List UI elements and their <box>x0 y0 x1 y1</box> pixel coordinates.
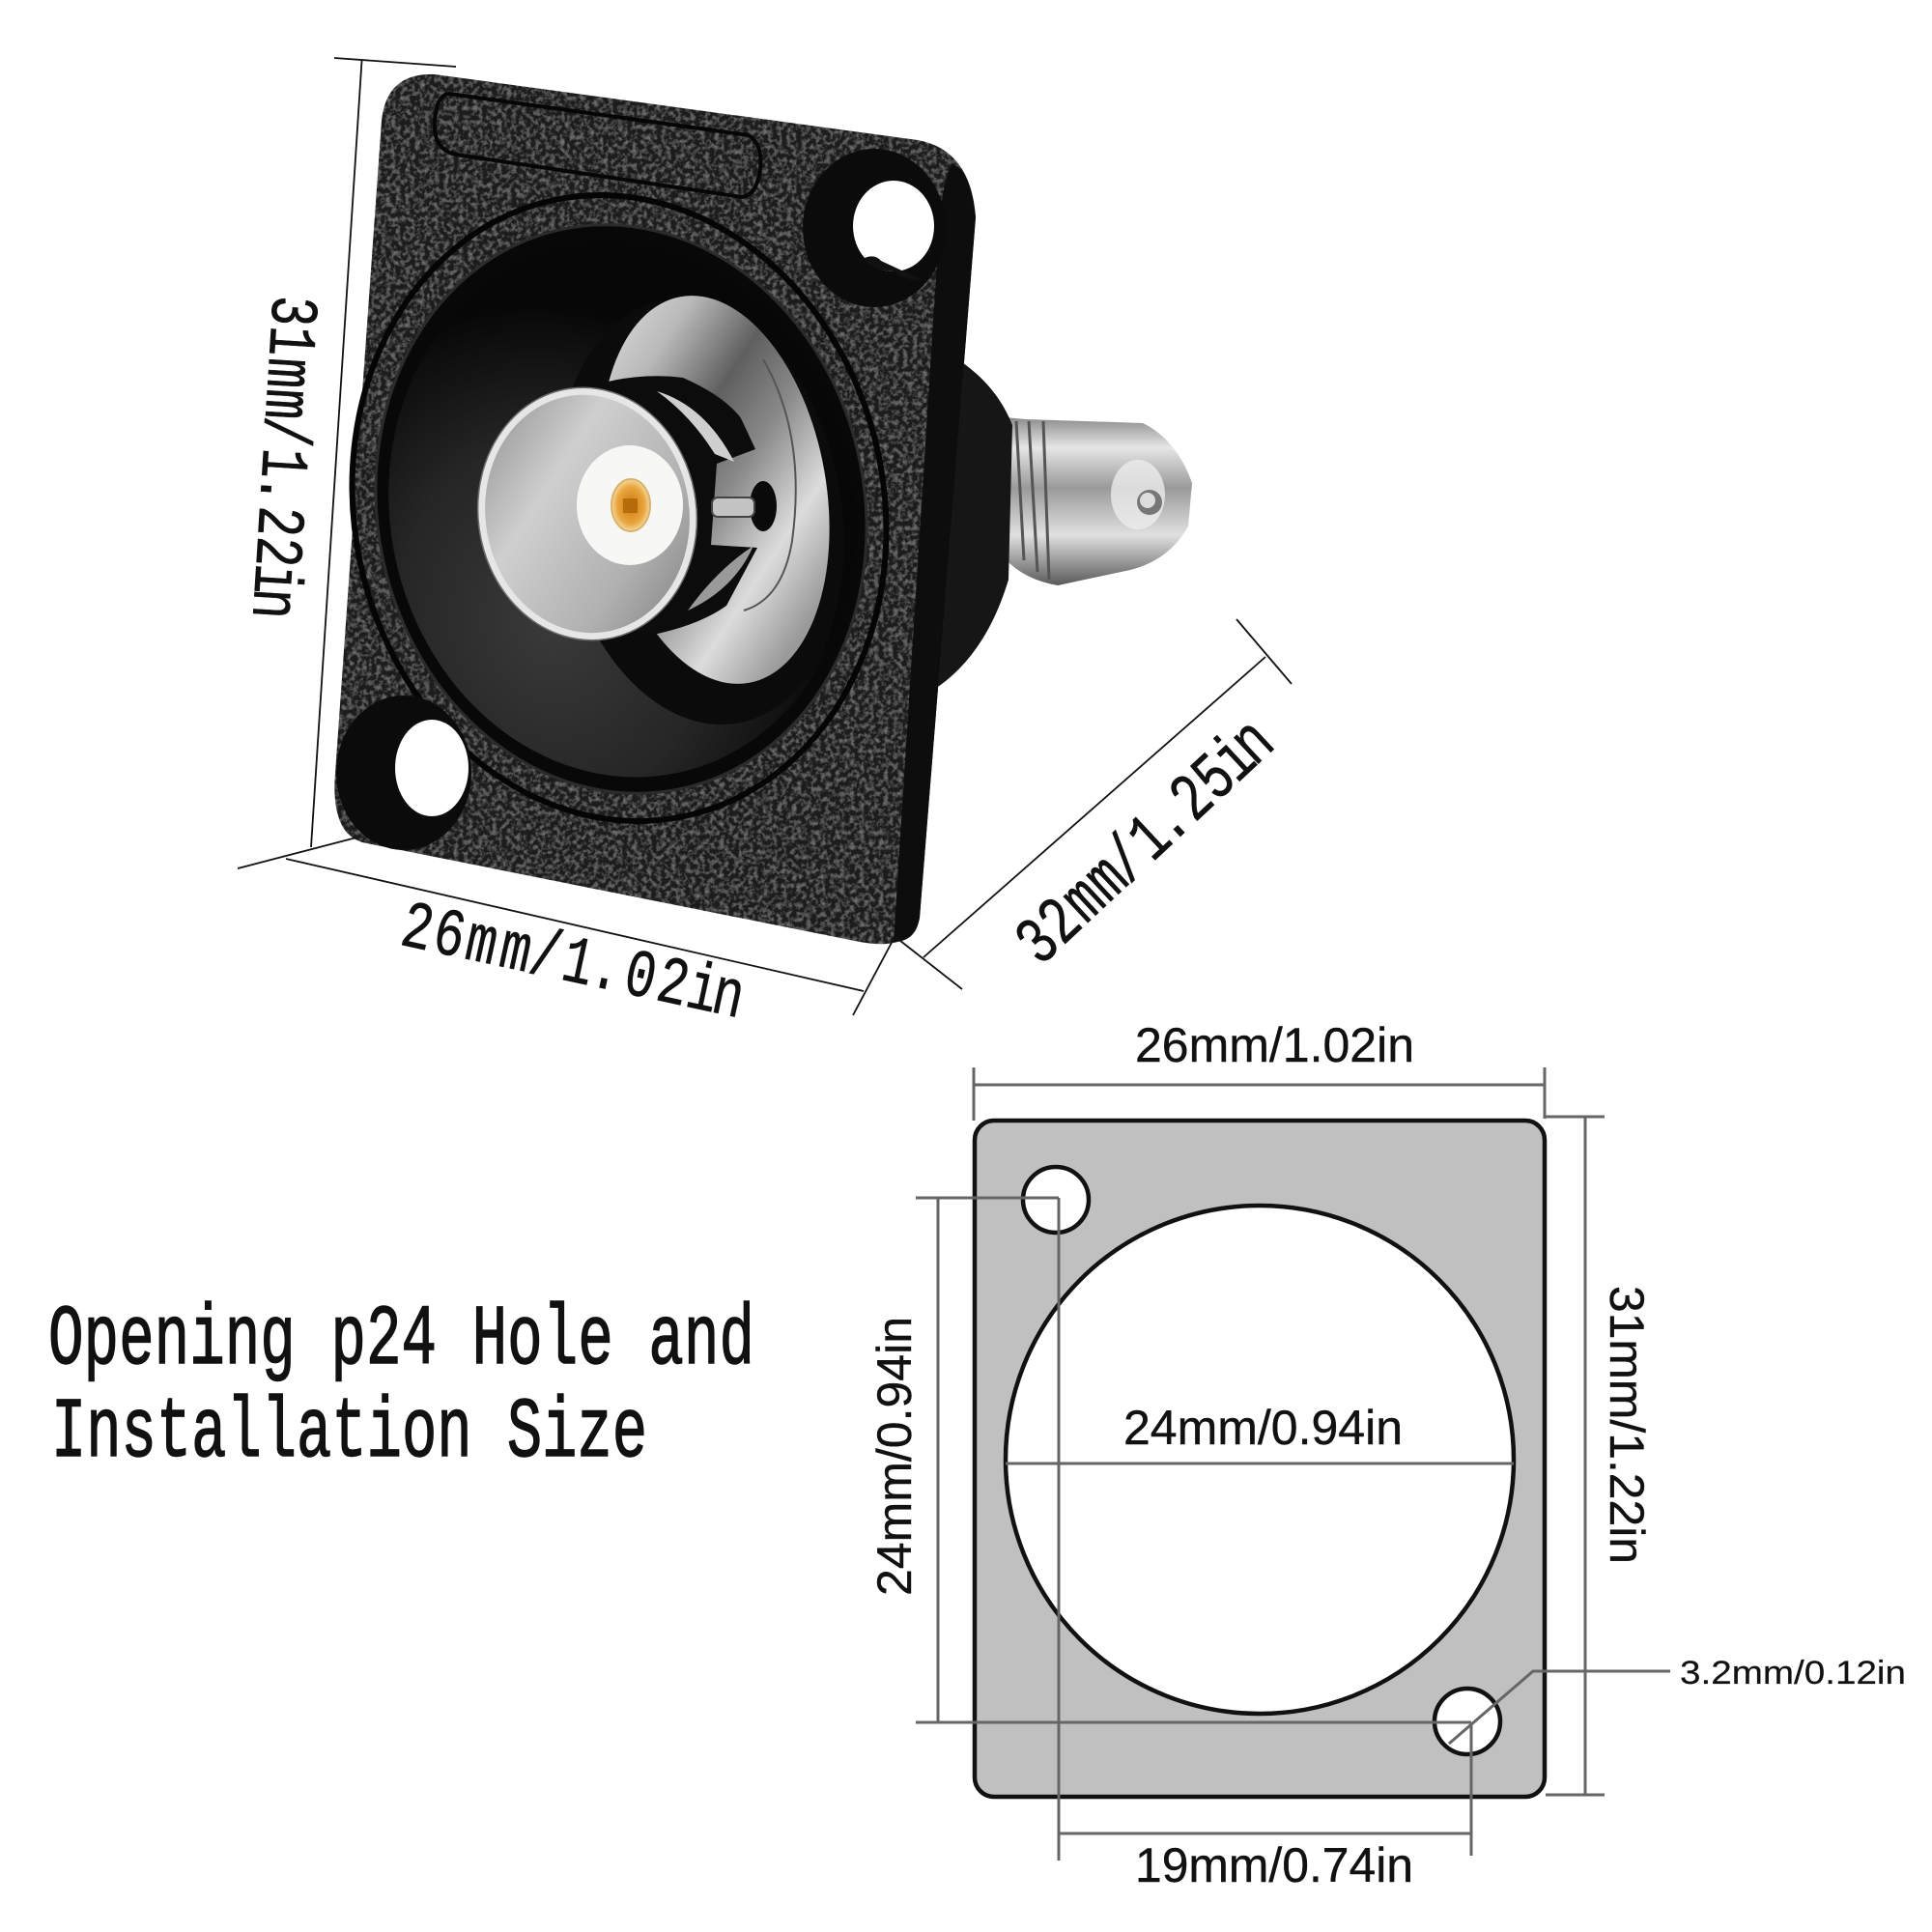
plate right edge shadow <box>894 164 976 942</box>
text: 24mm/0.94in hole: 24mm/0.94in <box>1123 1401 1403 1455</box>
recess parts <box>573 296 830 724</box>
photo dimension lines <box>238 58 1292 1015</box>
barrel front rim <box>466 378 709 650</box>
text: 26mm/1.02in top: 26mm/1.02in <box>1135 1018 1414 1072</box>
title: Installation Size <box>51 1386 647 1482</box>
gasket outer edge <box>295 145 944 871</box>
gasket inner lip <box>324 179 919 839</box>
barrel highlight streaks <box>657 391 734 462</box>
rear black cone <box>932 355 1012 691</box>
title: Opening p24 Hole and <box>48 1293 754 1389</box>
text: 31mm/1.22in rotated: 31mm/1.22in <box>1600 1286 1654 1564</box>
large hole <box>1006 1206 1514 1714</box>
bottom left mounting hole <box>336 696 471 850</box>
title <box>48 1293 754 1482</box>
flange groove <box>744 359 796 611</box>
raised gasket ring <box>295 145 944 871</box>
white insulator <box>577 445 683 565</box>
metal plate <box>334 74 976 944</box>
top right mounting hole <box>803 149 946 307</box>
top left screw hole <box>1023 1167 1089 1233</box>
rim outer shade <box>462 374 713 654</box>
photo: BNC panel-mount connector <box>295 74 1192 944</box>
dark sleeve behind flange <box>573 365 781 724</box>
recessed cup <box>339 199 905 821</box>
bayonet pin <box>712 481 777 531</box>
text: 19mm/0.74in: 19mm/0.74in <box>1135 1838 1413 1892</box>
textured plate and gasket <box>295 74 976 944</box>
label: 26mm/1.02in: 26mm/1.02in <box>394 889 752 1038</box>
connector rear silver body <box>1005 417 1192 585</box>
label strip outline <box>435 94 761 197</box>
plate outline <box>975 1121 1545 1797</box>
label: 32mm/1.25in: 32mm/1.25in <box>1002 704 1292 982</box>
label: 31mm/1.22in: 31mm/1.22in <box>232 294 330 621</box>
bottom right screw hole <box>1435 1689 1500 1754</box>
black barrel <box>589 376 757 638</box>
installation diagram <box>867 1018 1906 1892</box>
gold contact pin <box>611 479 650 531</box>
silver flange <box>609 296 830 684</box>
diagram dimension lines <box>916 1067 1670 1861</box>
text: 24mm/0.94in rotated: 24mm/0.94in <box>867 1317 922 1596</box>
text: 3.2mm/0.12in: 3.2mm/0.12in <box>1680 1655 1906 1691</box>
